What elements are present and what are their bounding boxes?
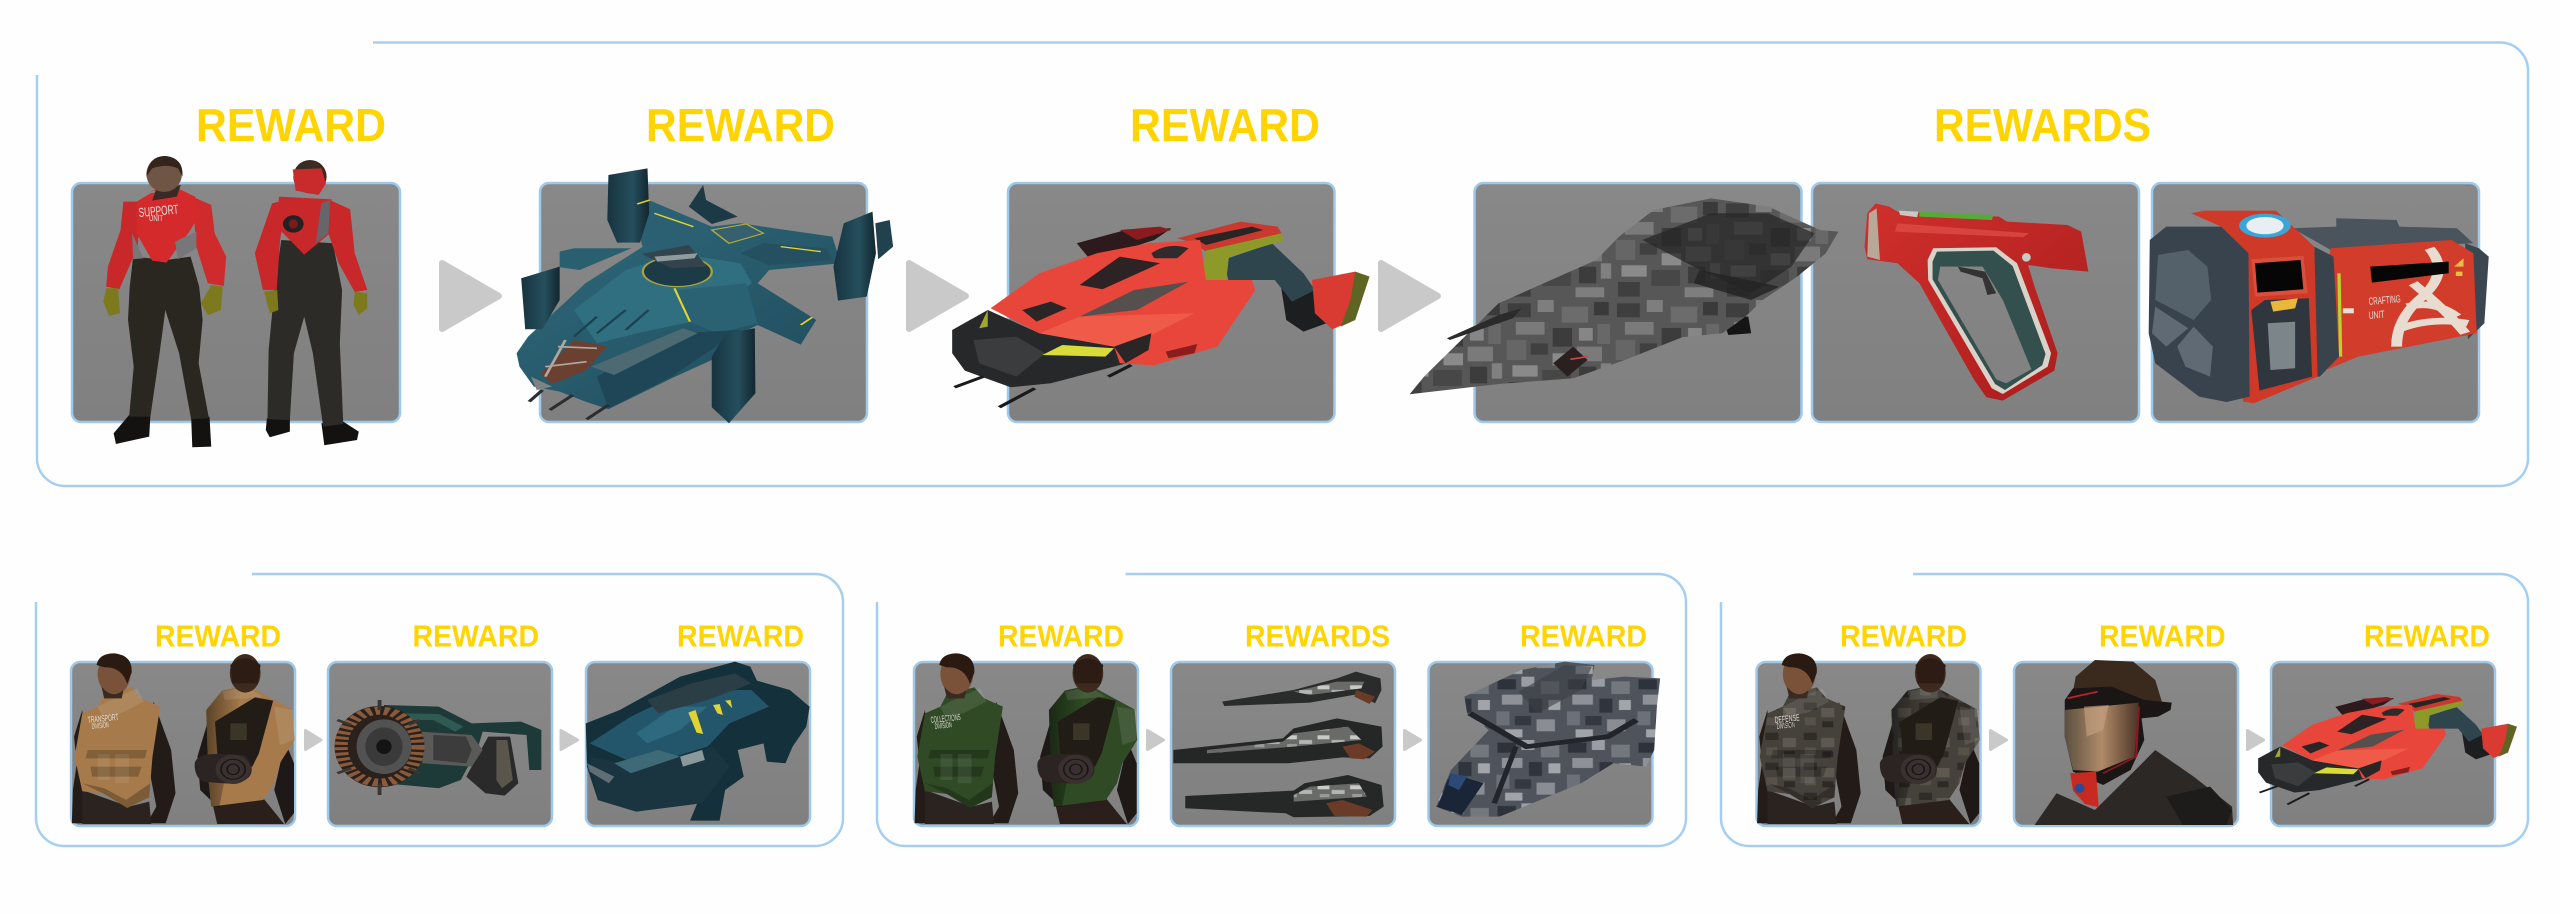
arrow 1 <box>1148 730 1164 750</box>
icon: three cannons <box>1173 672 1384 817</box>
panel outline <box>877 574 1686 846</box>
icon: tan vest character <box>72 653 295 824</box>
icon: blue camo warship <box>1436 662 1660 817</box>
heading: reward 3: REWARD <box>677 619 804 654</box>
vest lettering: DEFENSE <box>1774 712 1800 725</box>
tile 2 <box>1171 662 1395 826</box>
heading: reward 3: REWARD <box>1520 619 1647 654</box>
icon: walker ship <box>586 662 810 821</box>
icon: small red gunship <box>2258 694 2517 804</box>
tile 1 <box>72 183 400 422</box>
vest lettering: DIVISION <box>934 720 952 731</box>
vest lettering: TRANSPORT <box>87 712 119 725</box>
tile 2 <box>540 183 867 422</box>
heading: reward 1: REWARD <box>196 99 386 151</box>
vest lettering: DIVISION <box>1776 720 1795 731</box>
suit lettering: SUPPORT <box>138 202 179 220</box>
icon: red flight suit, front and back <box>103 156 367 447</box>
icon: disc cannon <box>335 700 541 796</box>
suit lettering <box>138 202 179 223</box>
panel: lower track 3 <box>1721 574 2528 846</box>
heading: reward 2: REWARD <box>412 619 539 654</box>
tile 2 <box>2014 662 2238 826</box>
vest lettering <box>87 712 119 731</box>
tile 2 <box>328 662 552 826</box>
panel outline <box>1721 574 2528 846</box>
heading: reward 1: REWARD <box>998 619 1124 654</box>
icon: green vest character <box>915 653 1137 824</box>
icon: grey camo warship <box>1410 198 1838 394</box>
arrow 2 <box>2248 730 2264 750</box>
arrow 2 <box>1404 730 1420 750</box>
arrow 2 <box>909 263 966 329</box>
panel: lower track 2 <box>877 574 1686 846</box>
icon: camo vest character <box>1757 653 1980 824</box>
suit lettering: UNIT <box>149 214 163 223</box>
arrow 2 <box>561 730 578 750</box>
tile 4 <box>1474 183 1802 422</box>
tile 1 <box>71 662 295 826</box>
panel: lower track 2: COLLECTIONS <box>930 712 961 725</box>
tile 5 <box>1812 183 2139 422</box>
icon: red gunship <box>952 222 1369 407</box>
arrow 1 <box>306 730 321 750</box>
panel outline <box>36 574 843 846</box>
heading: reward 1: REWARD <box>1840 619 1967 654</box>
panel: main reward track <box>37 42 2528 486</box>
heading: rewards 4: REWARDS <box>1934 99 2151 151</box>
panel outline <box>37 42 2528 486</box>
tile 3 <box>1428 662 1652 826</box>
tile 1 <box>1756 662 1980 826</box>
heading: reward 3: REWARD <box>2364 619 2490 654</box>
arrow 1 <box>1990 730 2006 750</box>
vest lettering <box>930 712 961 731</box>
crate lettering: UNIT <box>2368 309 2386 322</box>
icon: teal gunship <box>517 168 893 423</box>
tile 3 <box>1008 183 1334 422</box>
vest lettering <box>1774 712 1800 731</box>
crate lettering <box>2368 293 2401 322</box>
heading: reward 2: REWARD <box>646 99 835 151</box>
icon: helmet and visor <box>2035 660 2233 825</box>
vest lettering: DIVISION <box>91 720 109 731</box>
tile 6 <box>2152 183 2479 422</box>
arrow 3 <box>1381 263 1438 329</box>
heading: reward 3: REWARD <box>1130 99 1320 151</box>
arrow 1 <box>442 263 499 329</box>
crate lettering: CRAFTING <box>2368 293 2401 308</box>
panel: lower track 1 <box>36 574 843 846</box>
tile 3 <box>586 662 810 826</box>
heading: reward 1: REWARD <box>155 619 281 654</box>
heading: reward 2: REWARD <box>2099 619 2226 654</box>
tile 3 <box>2271 662 2495 826</box>
icon: red pistol <box>1865 203 2088 401</box>
heading: rewards 2: REWARDS <box>1245 619 1390 654</box>
tile 1 <box>914 662 1138 826</box>
icon: red crafting unit crate <box>2149 211 2489 403</box>
